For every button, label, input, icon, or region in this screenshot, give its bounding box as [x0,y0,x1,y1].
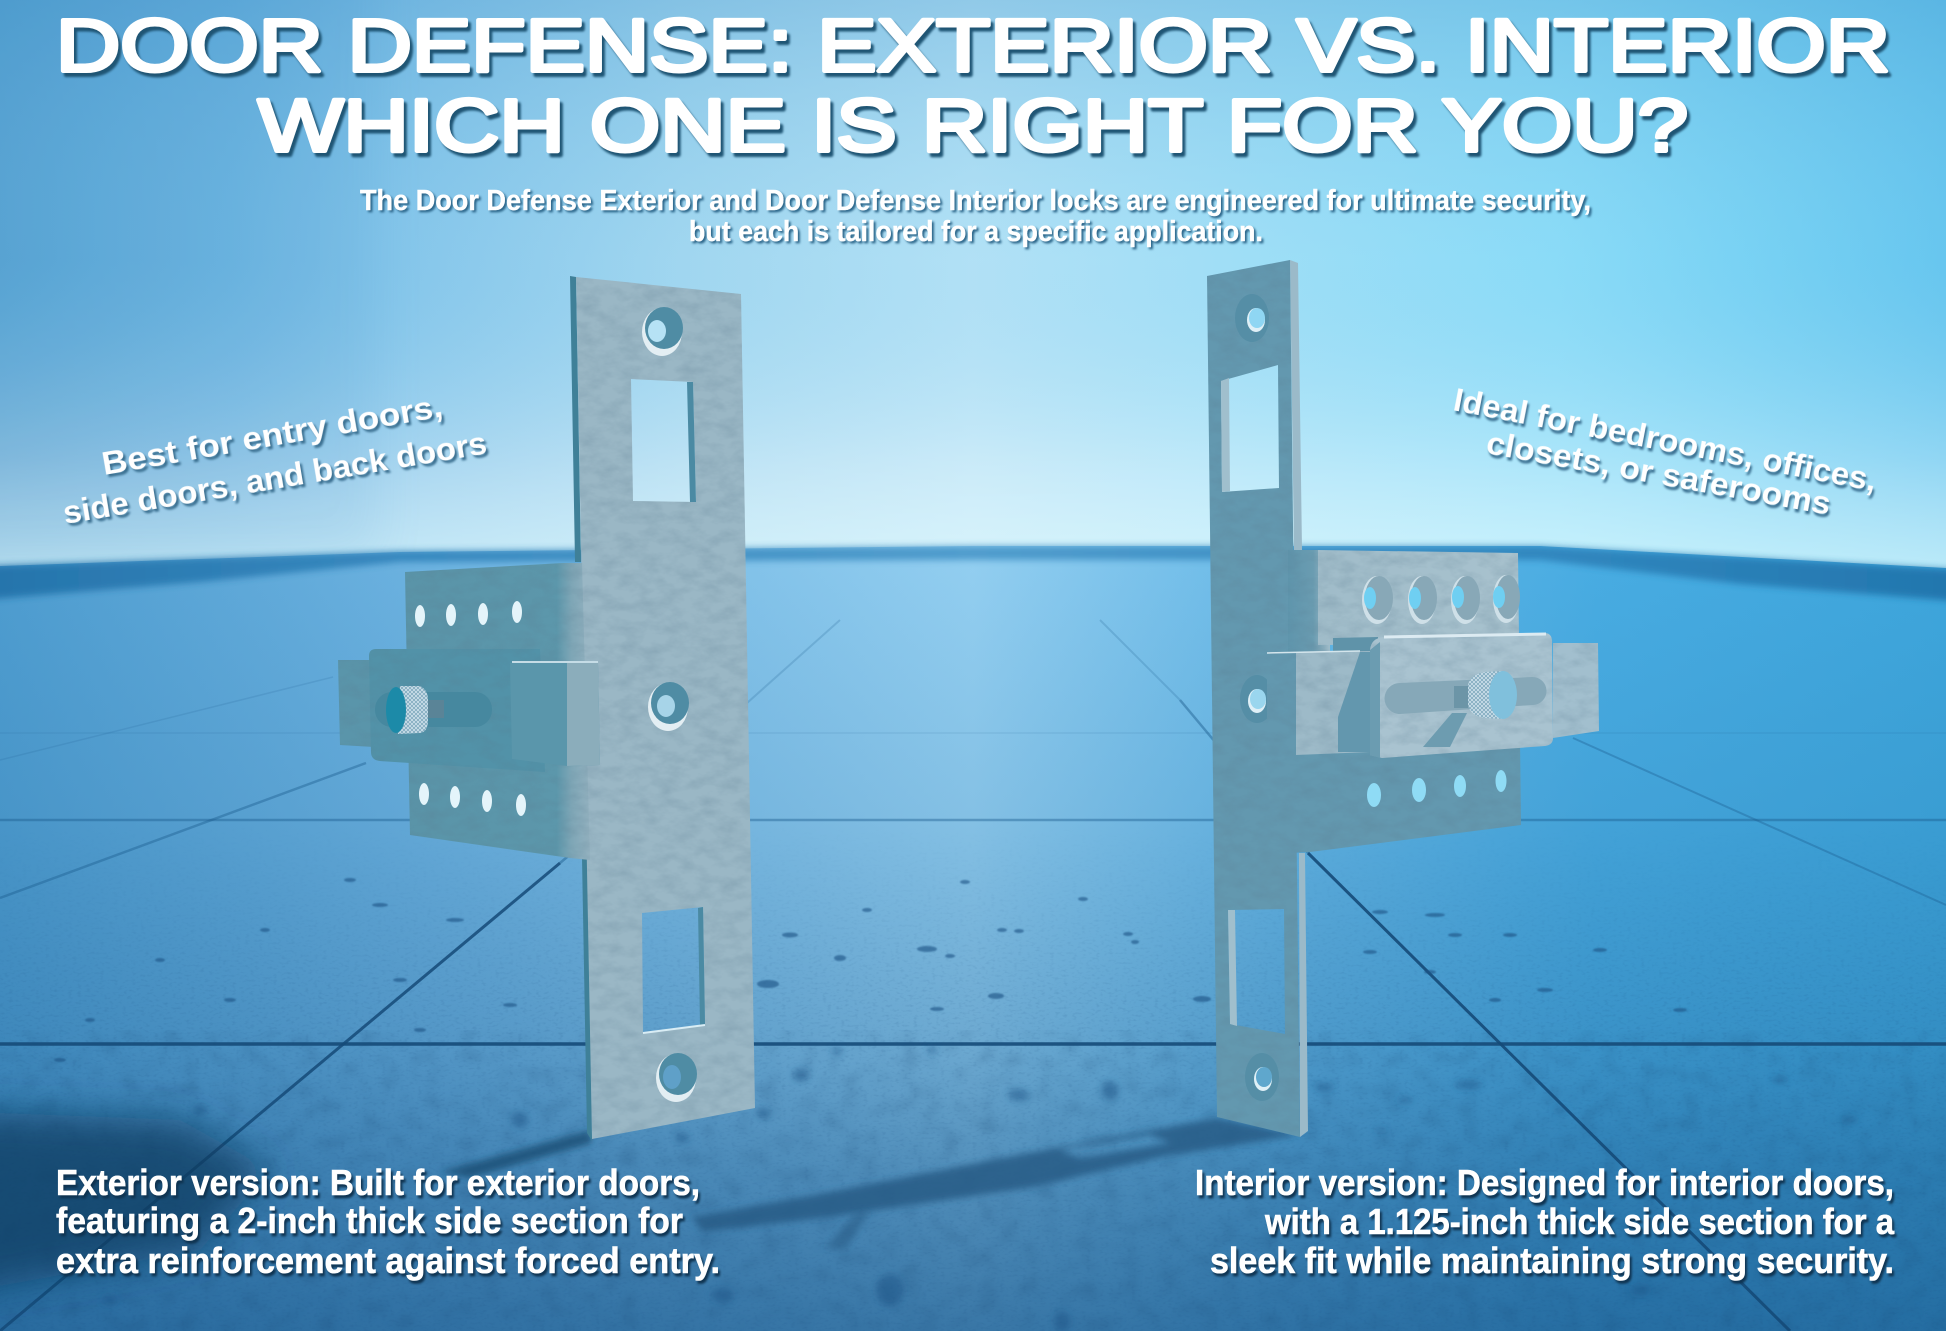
bolt slot [1384,677,1547,714]
plate screw holes [642,307,697,1102]
front block [510,662,600,766]
sleeve left shade [1370,642,1380,758]
callout: interior best use: Ideal for bedrooms, offices, [1451,382,1880,498]
side block holes [415,601,526,816]
strike plate with windows [576,277,755,1139]
side block upper face [1318,550,1519,645]
text block: interior version: Interior version: Designed for interior doors, [1195,1162,1894,1203]
subtitle [360,185,1591,248]
plate window inner walls [1221,378,1237,1026]
knob shadow on sleeve [1423,713,1467,747]
subtitle: The Door Defense Exterior and Door Defense Interior locks are engineered for ultimate security, [360,185,1591,217]
text block: exterior version: featuring a 2-inch thick side section for [56,1200,683,1241]
subtitle: but each is tailored for a specific application. [689,216,1263,248]
text block: interior version [1195,1162,1895,1281]
plate lower window lip [643,1025,705,1033]
callout: exterior best use: side doors, and back doors [60,425,489,531]
exterior lock illustration [338,276,755,1141]
side block lower face [1288,740,1521,853]
plate window inner walls [687,382,705,1026]
callout: interior best use: closets, or saferooms [1484,424,1834,522]
text block: exterior version [56,1162,720,1281]
text block: interior version: sleek fit while maintaining strong security. [1210,1240,1894,1281]
callout: exterior best use: Best for entry doors, [99,388,445,482]
sleeve top highlight [1384,634,1546,637]
strike plate with windows [1207,260,1300,1137]
knurled knob [1454,671,1517,719]
knurled knob [386,686,444,734]
side block dark corner [1288,550,1330,760]
text block: exterior version: extra reinforcement against forced entry. [56,1240,720,1281]
bolt sleeve [1370,633,1553,758]
text block: exterior version: Exterior version: Built for exterior doors, [56,1162,700,1203]
title: WHICH ONE IS RIGHT FOR YOU? [258,84,1688,167]
bolt slot [375,692,492,727]
title [56,4,1890,167]
plate screw holes [1235,294,1279,1101]
side block holes [1362,575,1520,807]
plate edge [1290,260,1308,1137]
side block [405,563,590,860]
blurred foreground speckles [102,1046,1858,1331]
floor shadows cast by the locks [0,1110,1299,1300]
floor speckles [54,878,1687,1062]
slide bar end [338,660,374,747]
interior lock illustration [1207,260,1599,1137]
bolt sleeve [369,649,545,772]
text block: interior version: with a 1.125-inch thick side section for a [1264,1201,1895,1242]
slide bar end [1553,643,1599,738]
front block [1267,637,1378,755]
title: DOOR DEFENSE: EXTERIOR VS. INTERIOR [56,4,1890,87]
plate edge [570,276,592,1141]
